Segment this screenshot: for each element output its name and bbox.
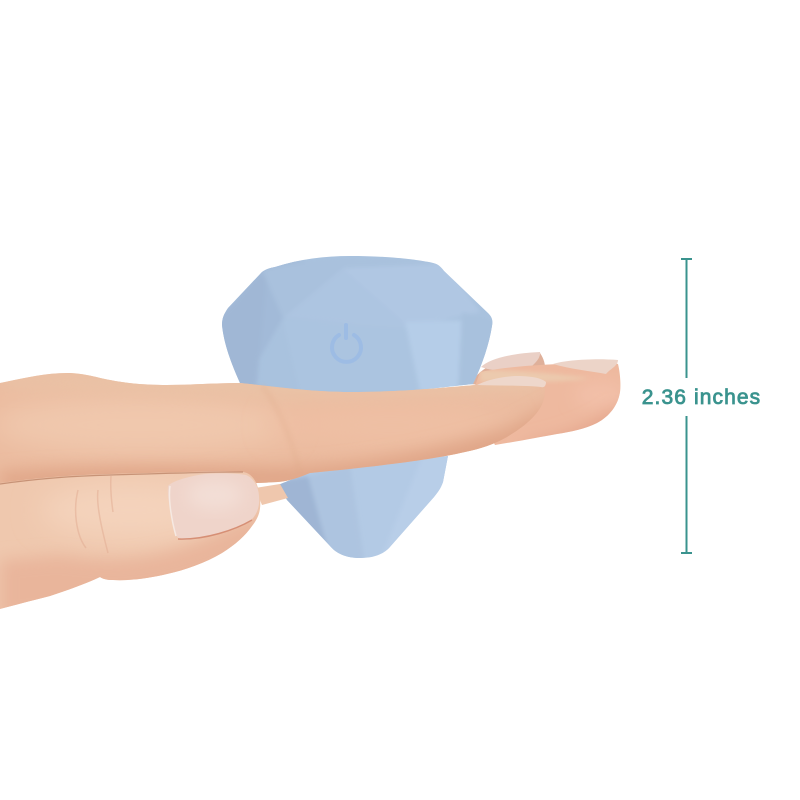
index finger bbox=[0, 373, 546, 484]
dimension label: 2.36 inches bbox=[642, 386, 761, 409]
thumb bbox=[0, 472, 260, 609]
lower part of the device bbox=[280, 456, 448, 558]
product photo and dimension illustration bbox=[0, 256, 760, 609]
upper part of the device bbox=[222, 256, 492, 392]
thumb nail bbox=[168, 473, 259, 540]
icon: power symbol bbox=[332, 325, 361, 362]
middle finger segment below the hand bbox=[255, 484, 288, 505]
index finger nail bbox=[477, 376, 546, 387]
third fingertip behind bbox=[470, 352, 545, 386]
far fingertip bbox=[476, 359, 620, 445]
line between index finger and thumb bbox=[0, 472, 243, 484]
dimension bracket bbox=[681, 259, 692, 553]
finger crease near the device bbox=[262, 386, 300, 474]
